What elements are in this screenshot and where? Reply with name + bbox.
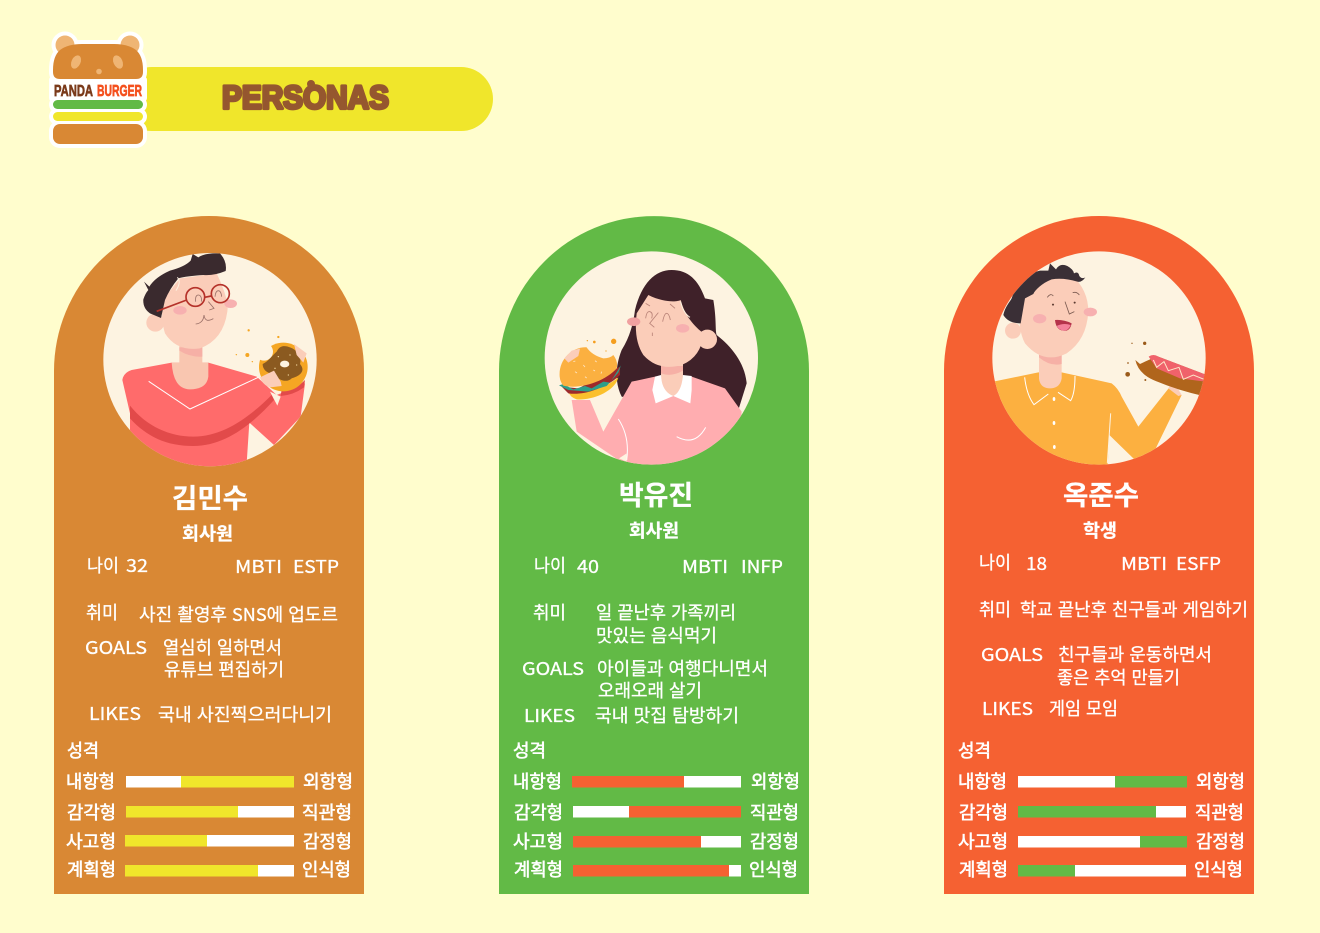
hobby: 취미: [979, 596, 1011, 622]
age: [534, 552, 599, 579]
slider: 사고 감정: 감정형: [1196, 828, 1245, 854]
slider: 계획 인식: [959, 856, 1243, 882]
age: 32: [126, 552, 148, 578]
slider: 계획 인식: 인식형: [302, 856, 351, 882]
goals: 오래오래 살기: [598, 677, 702, 703]
slider: 계획 인식: 인식형: [749, 856, 798, 882]
slider: 계획 인식: [67, 856, 351, 882]
age: 18: [1026, 550, 1047, 576]
slider: 계획 인식: 계획형: [959, 856, 1008, 882]
age: [87, 552, 148, 578]
mbti: MBTI: [682, 553, 728, 579]
likes: LIKES: [982, 695, 1033, 721]
goals: GOALS: [85, 634, 147, 660]
likes: [982, 695, 1118, 721]
slider: 사고 감정: [958, 828, 1245, 854]
slider: 내향 외향: 외항형: [751, 768, 800, 794]
name: 옥준수: [1063, 474, 1139, 513]
slider: 내향 외향: 내항형: [513, 768, 562, 794]
goals: [522, 655, 768, 703]
goals: 유튜브 편집하기: [164, 656, 284, 682]
likes: [89, 700, 332, 727]
slider: 계획 인식: 인식형: [1194, 856, 1243, 882]
logo: panda burger: BURGER: [97, 83, 142, 100]
slider: 내향 외향: [513, 768, 800, 794]
mbti: [1121, 550, 1221, 576]
likes: 국내 사진찍으러다니기: [158, 701, 332, 727]
slider: 내향 외향: 내항형: [958, 768, 1007, 794]
slider: 사고 감정: 사고형: [66, 828, 116, 854]
likes: 게임 모임: [1049, 695, 1118, 721]
slider: 사고 감정: 감정형: [750, 828, 799, 854]
logo: panda burger: PANDA: [54, 83, 93, 100]
age: 나이: [534, 552, 566, 578]
panel: persona 옥준수: [944, 216, 1254, 894]
portrait: man eating donut: [103, 253, 317, 473]
personality heading: 성격: [67, 737, 99, 763]
mbti: MBTI: [235, 553, 282, 579]
goals: [85, 634, 284, 682]
mbti: ESFP: [1176, 550, 1221, 576]
name: 박유진: [619, 474, 693, 513]
mbti: [235, 553, 339, 579]
slider: 사고 감정: 감정형: [303, 828, 352, 854]
goals: [981, 641, 1212, 690]
goals: 좋은 추억 만들기: [1057, 664, 1180, 690]
slider: 감각 직관: 감각형: [67, 799, 116, 825]
slider: 감각 직관: [959, 799, 1244, 825]
likes: [524, 702, 739, 728]
hobby: 취미: [86, 599, 118, 625]
likes: 국내 맛집 탐방하기: [595, 702, 739, 728]
slider: 계획 인식: 계획형: [67, 856, 116, 882]
slider: 감각 직관: [514, 799, 799, 825]
job: 학생: [1083, 517, 1117, 543]
job: 회사원: [629, 517, 679, 543]
hobby: 사진 촬영후 SNS에 업도르: [139, 601, 338, 627]
panel: persona 박유진: [499, 216, 809, 894]
hobby: 맛있는 음식먹기: [596, 622, 717, 648]
likes: LIKES: [89, 700, 141, 726]
name: 김민수: [172, 477, 248, 516]
slider: 사고 감정: 사고형: [958, 828, 1008, 854]
personality heading: 성격: [513, 737, 546, 763]
mbti: ESTP: [293, 553, 339, 579]
portrait: woman eating burger: [545, 251, 758, 473]
likes: LIKES: [524, 702, 575, 728]
slider: 계획 인식: [514, 856, 798, 882]
slider: 감각 직관: 직관형: [750, 799, 799, 825]
slider: 감각 직관: 직관형: [302, 799, 352, 825]
mbti: MBTI: [1121, 550, 1167, 576]
personality heading: 성격: [958, 737, 991, 763]
slider: 계획 인식: 계획형: [514, 856, 563, 882]
slider: 감각 직관: 감각형: [959, 799, 1008, 825]
slider: 내향 외향: 외항형: [1196, 768, 1245, 794]
age: [979, 549, 1047, 576]
hobby: [533, 599, 736, 648]
logo: panda burger: [53, 36, 143, 144]
mbti: INFP: [741, 553, 783, 579]
goals: GOALS: [981, 641, 1043, 667]
slider: 내향 외향: 내항형: [66, 768, 115, 794]
slider: 내향 외향: [958, 768, 1245, 794]
hobby: 일 끝난후 가족끼리: [596, 599, 736, 625]
mbti: [682, 553, 783, 579]
slider: 감각 직관: 감각형: [514, 799, 563, 825]
title: PERSONAS: PERSONAS: [222, 80, 389, 116]
age: 나이: [979, 549, 1011, 575]
goals: 열심히 일하면서: [163, 634, 282, 660]
age: 나이: [87, 552, 119, 578]
portrait: man eating hot dog: [992, 251, 1207, 473]
goals: 친구들과 운동하면서: [1058, 641, 1212, 667]
goals: GOALS: [522, 655, 584, 681]
job: 회사원: [182, 520, 233, 546]
slider: 사고 감정: 사고형: [513, 828, 563, 854]
slider: 감각 직관: [67, 799, 352, 825]
slider: 사고 감정: [66, 828, 352, 854]
goals: 아이들과 여행다니면서: [597, 655, 768, 681]
slider: 사고 감정: [513, 828, 799, 854]
panel: persona 김민수: [54, 216, 364, 894]
hobby: 학교 끝난후 친구들과 게임하기: [1020, 596, 1248, 622]
title banner: [120, 67, 493, 131]
slider: 감각 직관: 직관형: [1195, 799, 1244, 825]
slider: 내향 외향: 외항형: [303, 768, 353, 794]
hobby: 취미: [533, 599, 566, 625]
age: 40: [577, 553, 599, 579]
slider: 내향 외향: [66, 768, 353, 794]
